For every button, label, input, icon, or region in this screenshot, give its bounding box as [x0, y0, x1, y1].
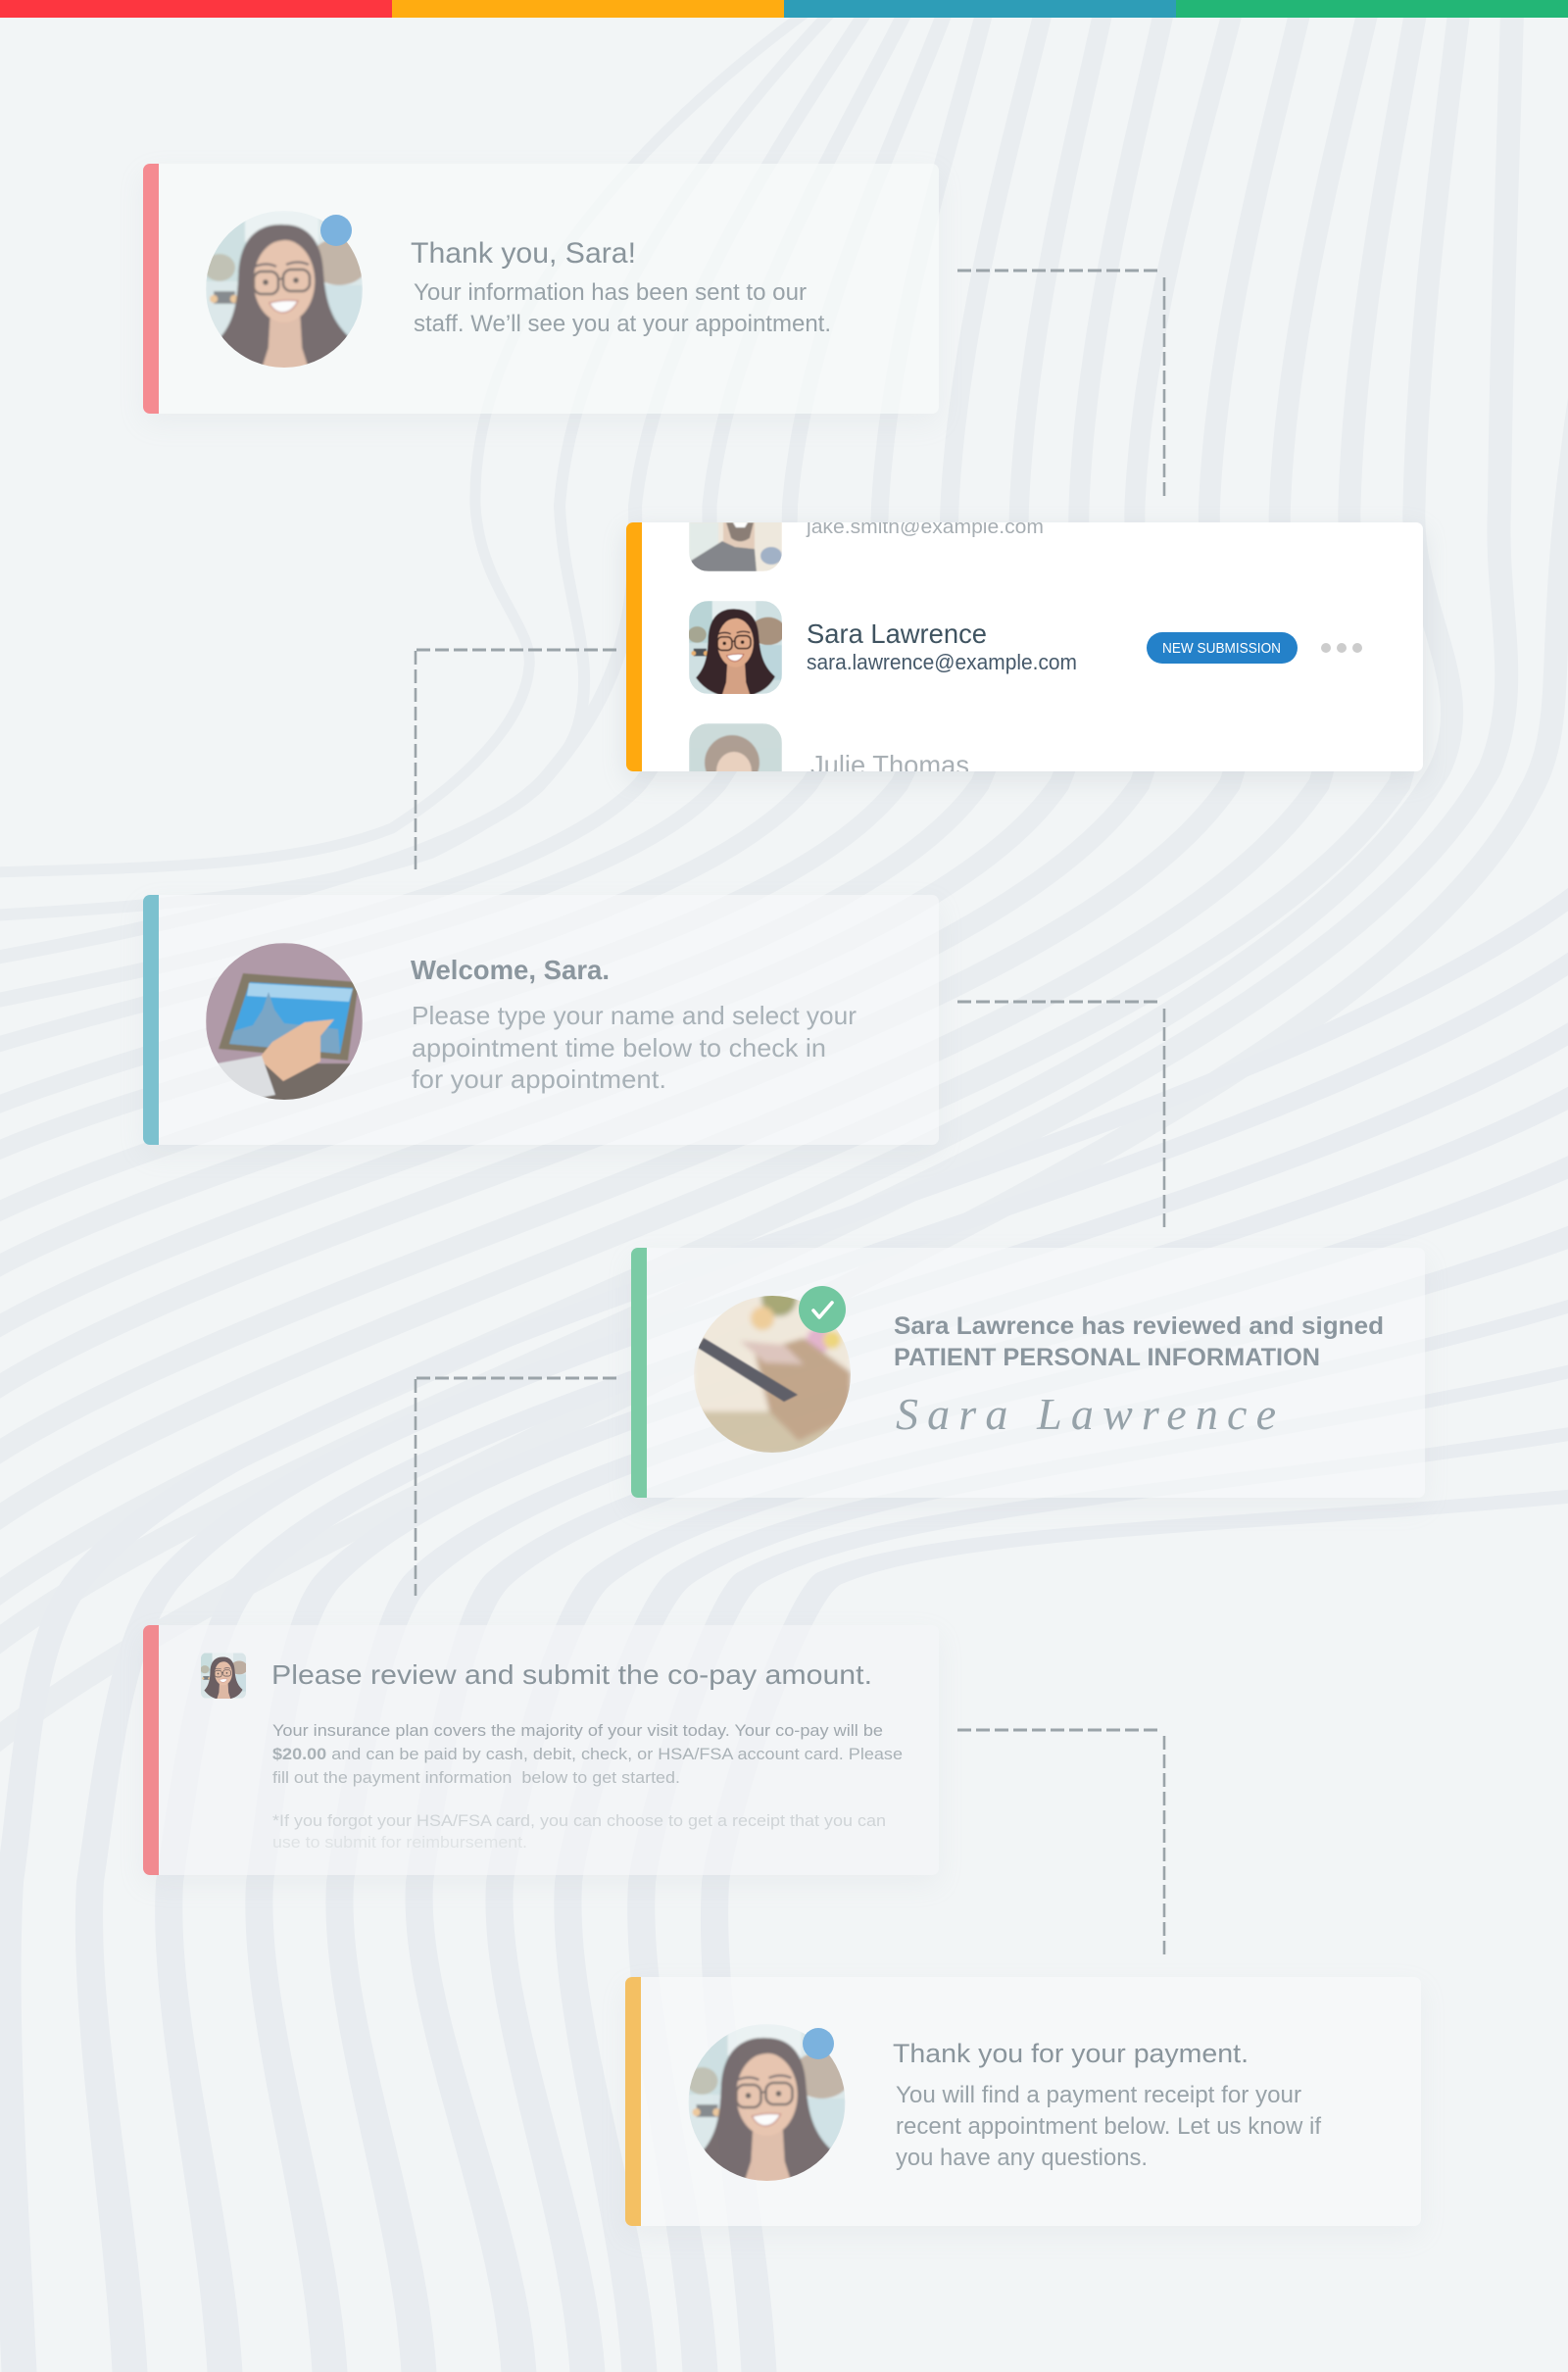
panel: thank you confirmation	[143, 164, 939, 414]
icon: notification dot	[320, 215, 352, 246]
body text	[896, 2082, 1321, 2171]
heading: Thank you for your payment.	[893, 2039, 1249, 2068]
status pill	[1147, 632, 1298, 664]
heading: Please review and submit the co-pay amount.	[271, 1659, 872, 1690]
accent bar	[625, 1977, 641, 2226]
arrow: connector from card four to card five	[416, 1378, 616, 1596]
name and email: Sara: sara.lawrence@example.com	[807, 650, 1077, 674]
body text: staff. We’ll see you at your appointment.	[414, 311, 831, 337]
footnote: use to submit for reimbursement.	[272, 1833, 527, 1852]
accent bar	[143, 164, 159, 414]
body text: recent appointment below. Let us know if	[896, 2113, 1321, 2140]
heading: PATIENT PERSONAL INFORMATION	[894, 1344, 1320, 1371]
body text: You will find a payment receipt for your	[896, 2082, 1301, 2108]
body text	[412, 1001, 857, 1094]
arrow: connector from card three to card four	[957, 1002, 1164, 1228]
arrow: connector from card five to card six	[957, 1730, 1164, 1955]
photo: Julie row	[689, 723, 782, 771]
panel: welcome check in	[143, 895, 939, 1145]
photo: Sara row	[688, 601, 786, 697]
body text	[414, 279, 831, 337]
body text	[272, 1721, 903, 1787]
body text: for your appointment.	[412, 1064, 666, 1094]
heading	[894, 1312, 1384, 1371]
body text: appointment time below to check in	[412, 1033, 826, 1062]
photo: smiling patient	[686, 2024, 851, 2186]
body text: $20.00 and can be paid by cash, debit, check, or HSA/FSA account card. Please	[272, 1745, 903, 1763]
status pill: NEW SUBMISSION	[1162, 641, 1281, 657]
icon: overflow dots	[1321, 643, 1362, 653]
footnote	[272, 1811, 886, 1852]
photo: hand on check-in tablet	[201, 943, 363, 1103]
photo: small patient thumbnail	[200, 1653, 248, 1700]
accent bar	[143, 1625, 159, 1875]
photo: Jake row	[689, 522, 782, 571]
top colour bar	[0, 0, 1568, 18]
heading: Welcome, Sara.	[411, 955, 610, 985]
panel: submission list	[626, 522, 1423, 771]
photo: smiling patient	[204, 211, 368, 372]
panel: signed form	[631, 1248, 1425, 1498]
footnote: *If you forgot your HSA/FSA card, you can choose to get a receipt that you can	[272, 1811, 886, 1830]
body text: Your insurance plan covers the majority of your visit today. Your co-pay will be	[272, 1721, 883, 1740]
signature: Sara Lawrence	[896, 1389, 1276, 1439]
arrow: connector from card two to card three	[416, 650, 616, 869]
name and email: Sara: Sara Lawrence	[807, 618, 987, 649]
body text: Your information has been sent to our	[414, 279, 807, 306]
name and email: Sara	[807, 618, 1077, 674]
heading: Thank you, Sara!	[411, 237, 636, 270]
icon: notification dot	[803, 2028, 834, 2059]
panel: payment thank you	[625, 1977, 1321, 2226]
body text: you have any questions.	[896, 2145, 1148, 2171]
heading: Sara Lawrence has reviewed and signed	[894, 1312, 1384, 1340]
accent bar	[626, 522, 642, 771]
body text: fill out the payment information below to get started.	[272, 1768, 680, 1787]
body text: Please type your name and select your	[412, 1001, 857, 1030]
panel: co-pay review	[143, 1625, 939, 1875]
photo: hand holding a phone	[694, 1296, 851, 1453]
accent bar	[631, 1248, 647, 1498]
accent bar	[143, 895, 159, 1145]
icon: green check badge	[799, 1286, 846, 1333]
arrow: connector from card one to card two	[957, 271, 1164, 497]
